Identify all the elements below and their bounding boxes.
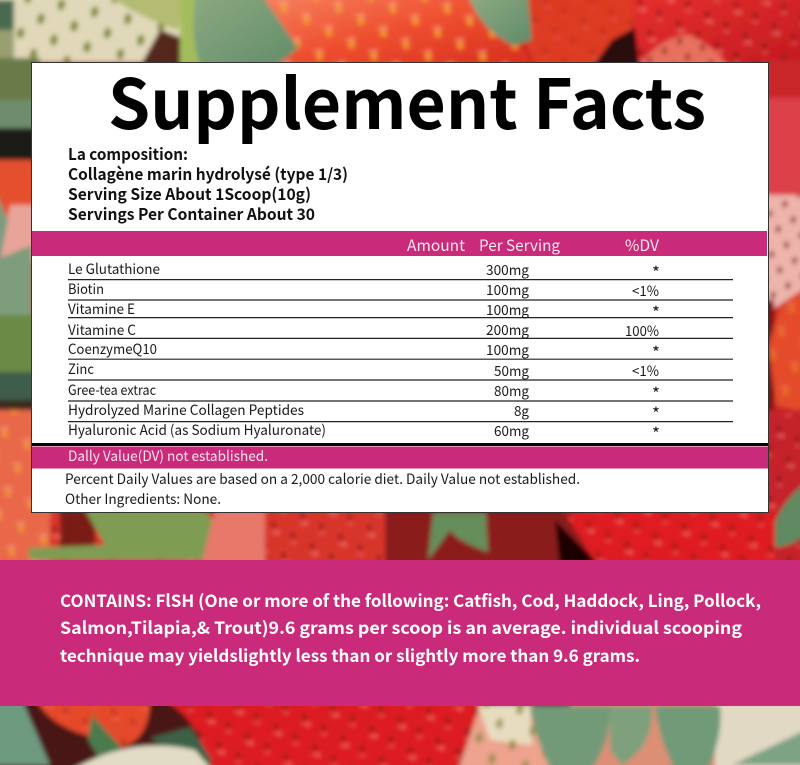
contains text <box>60 587 761 667</box>
nutrient names: Vitamine C <box>68 320 136 340</box>
percent daily value column: <1% <box>632 361 659 381</box>
footnotes <box>65 469 580 509</box>
amounts: 300mg <box>486 260 529 280</box>
nutrient names: Gree-tea extrac <box>68 380 156 400</box>
panel: supplement facts label <box>32 49 768 512</box>
daily value band <box>32 446 768 468</box>
lower middle leaf <box>428 513 488 560</box>
amounts: 100mg <box>486 280 529 300</box>
nutrient names: Hydrolyzed Marine Collagen Peptides <box>68 400 304 420</box>
asterisks: * <box>652 339 660 364</box>
thick table rule <box>32 443 768 446</box>
dark gap near sepal <box>138 30 182 70</box>
percent daily value column: 100% <box>625 321 659 341</box>
amounts: 8g <box>514 401 529 421</box>
top dark gap <box>590 25 652 70</box>
top small leaf <box>468 0 532 46</box>
left edge greens and reds <box>0 0 14 30</box>
bottom strip dark base <box>0 700 800 765</box>
nutrient names <box>68 259 326 440</box>
nutrient names: Hyaluronic Acid (as Sodium Hyaluronate) <box>68 420 326 440</box>
asterisks: * <box>652 400 660 425</box>
serving information: Servings Per Container About 30 <box>68 201 315 225</box>
right edge berries <box>760 60 800 100</box>
asterisks <box>652 259 660 445</box>
lower dark wedge <box>555 520 600 566</box>
bottom small leaves <box>88 715 122 760</box>
bottom white berry <box>72 746 212 765</box>
bottom pink-cream berry <box>458 705 560 765</box>
bottom left orange berry <box>36 700 150 748</box>
asterisks: * <box>652 420 660 445</box>
asterisks: * <box>652 259 660 284</box>
top right strawberry <box>630 0 800 70</box>
amounts: 100mg <box>486 340 529 360</box>
top left cream strawberry <box>0 0 190 62</box>
asterisks: * <box>652 299 660 324</box>
serving information <box>68 141 348 225</box>
daily value band: Dally Value(DV) not established. <box>68 446 268 466</box>
top orange strawberry <box>240 0 536 70</box>
table header band: %DV <box>625 234 659 256</box>
bottom large red berry <box>165 700 482 765</box>
bottom left leaf <box>0 700 50 765</box>
top left sepal <box>108 0 185 30</box>
leaf lime edge <box>180 0 204 74</box>
nutrient names: Zinc <box>68 359 94 379</box>
nutrient names: Biotin <box>68 279 104 299</box>
percent daily value column <box>625 281 659 381</box>
footnotes: Percent Daily Values are based on a 2,000 calorie diet. Daily Value not established. <box>65 469 580 489</box>
lower right red berry <box>560 505 775 570</box>
amounts: 60mg <box>494 421 529 441</box>
bottom right cream and red <box>570 700 800 765</box>
table header band: Per Serving <box>479 234 560 256</box>
lower pink zone <box>200 510 265 570</box>
top red strawberry centre <box>510 0 640 70</box>
amounts <box>486 260 529 441</box>
row rules <box>68 280 733 422</box>
amounts: 50mg <box>494 361 529 381</box>
footnotes: Other Ingredients: None. <box>65 489 221 509</box>
serving information: La composition: <box>68 141 188 165</box>
nutrient names: CoenzymeQ10 <box>68 339 157 359</box>
contains text: Salmon,Tilapia,& Trout)9.6 grams per scoop is an average. individual scooping <box>60 614 742 639</box>
amounts: 80mg <box>494 381 529 401</box>
top right small berry <box>636 35 730 70</box>
nutrient names: Vitamine E <box>68 299 135 319</box>
serving information: Collagène marin hydrolysé (type 1/3) <box>68 161 348 185</box>
table header band: Amount <box>407 234 465 256</box>
top green leaf <box>180 0 298 75</box>
percent daily value column: <1% <box>632 281 659 301</box>
nutrient table <box>68 259 733 445</box>
table header band <box>32 231 767 256</box>
bottom leaves <box>530 706 610 765</box>
pink contains band <box>0 560 800 706</box>
contains text: technique may yieldslightly less than or slightly more than 9.6 grams. <box>60 642 640 667</box>
right leaf <box>766 480 800 548</box>
lower band berries <box>50 505 420 570</box>
title: Supplement Facts <box>108 49 706 149</box>
amounts: 200mg <box>486 320 529 340</box>
nutrient names: Le Glutathione <box>68 259 160 279</box>
lower sepal <box>28 510 216 560</box>
asterisks: * <box>652 380 660 405</box>
contains text: CONTAINS: FlSH (One or more of the following: Catfish, Cod, Haddock, Ling, Pollock, <box>60 587 761 612</box>
amounts: 100mg <box>486 300 529 320</box>
serving information: Serving Size About 1Scoop(10g) <box>68 181 311 205</box>
lower middle dark red <box>385 505 600 565</box>
